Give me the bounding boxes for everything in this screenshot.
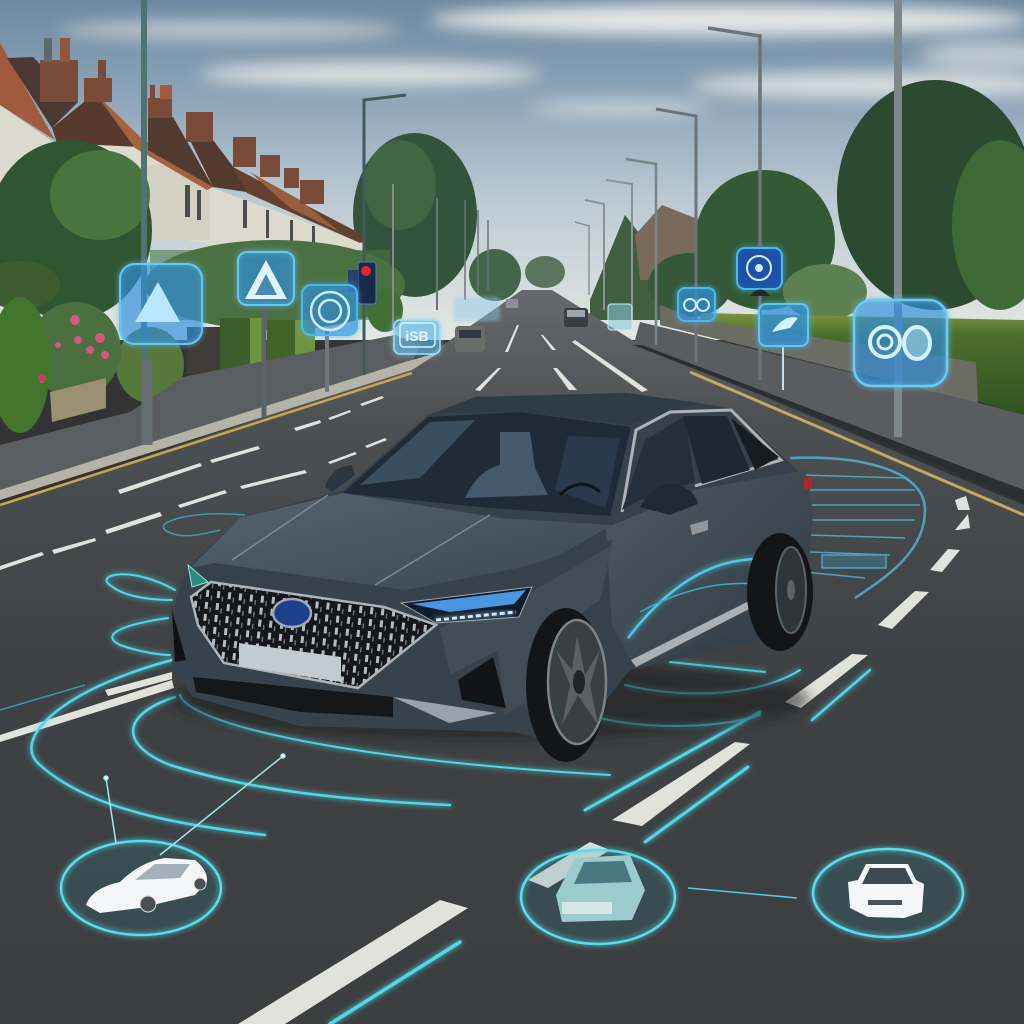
car: mirrors <box>640 484 698 515</box>
car: door side panel <box>606 470 813 668</box>
road edge: left kerb <box>0 352 440 505</box>
road markings <box>0 325 970 1024</box>
main car <box>172 393 813 762</box>
traffic light <box>348 262 376 304</box>
sign: coin <box>737 248 782 296</box>
sign: distant panel <box>454 297 500 321</box>
car: windshield <box>343 412 631 516</box>
sign: steering <box>759 304 808 346</box>
sensor scan lines: car path <box>31 574 870 1024</box>
car: rear wheel <box>747 533 813 651</box>
sensor field: behind the car <box>790 458 925 598</box>
sign: eye small <box>678 288 715 321</box>
holographic signs <box>120 248 947 386</box>
sign: double ring <box>854 300 947 386</box>
road surface <box>0 290 1024 1024</box>
car: lower intake and splitter <box>193 677 393 717</box>
distant cars <box>455 299 588 352</box>
houses: left terrace <box>0 38 367 262</box>
car: grille <box>191 582 436 688</box>
car: roof <box>436 393 700 425</box>
sky <box>0 0 1024 340</box>
detection: white sedan <box>61 841 221 935</box>
car: hood <box>190 493 612 590</box>
car: front fascia <box>172 540 612 732</box>
sign: distant right <box>608 304 632 330</box>
detection: teal hatchback <box>521 850 675 944</box>
sensor scan lines: faint <box>0 514 245 710</box>
pavement: left <box>0 335 420 497</box>
street lamps <box>144 0 898 445</box>
sign: speed label <box>394 320 440 354</box>
sign: warning triangle <box>120 264 202 344</box>
car: ground shadow <box>170 660 810 740</box>
clouds <box>60 4 1024 116</box>
car: body <box>172 393 813 745</box>
trees: background <box>353 80 1024 320</box>
car: headlight right <box>401 587 532 623</box>
pavement: right <box>633 322 1024 495</box>
car: headlight left <box>188 565 208 587</box>
sign: speed label: iSB <box>405 328 429 344</box>
car: badge <box>273 599 311 627</box>
nearby vehicle detections <box>61 754 963 944</box>
road edge: right kerb <box>633 345 1024 515</box>
garden hedges: right <box>660 305 1024 417</box>
garden hedges: left <box>0 140 405 433</box>
car: front wheel <box>526 608 606 762</box>
car: number plate <box>239 643 341 682</box>
sign: road works <box>238 252 294 305</box>
detection: connector lines <box>104 754 797 898</box>
car: silver roof trim <box>622 410 781 512</box>
car: tail light <box>804 478 812 489</box>
detection: white SUV <box>813 849 963 937</box>
car: side windows <box>622 416 695 510</box>
sign: target <box>302 285 357 335</box>
